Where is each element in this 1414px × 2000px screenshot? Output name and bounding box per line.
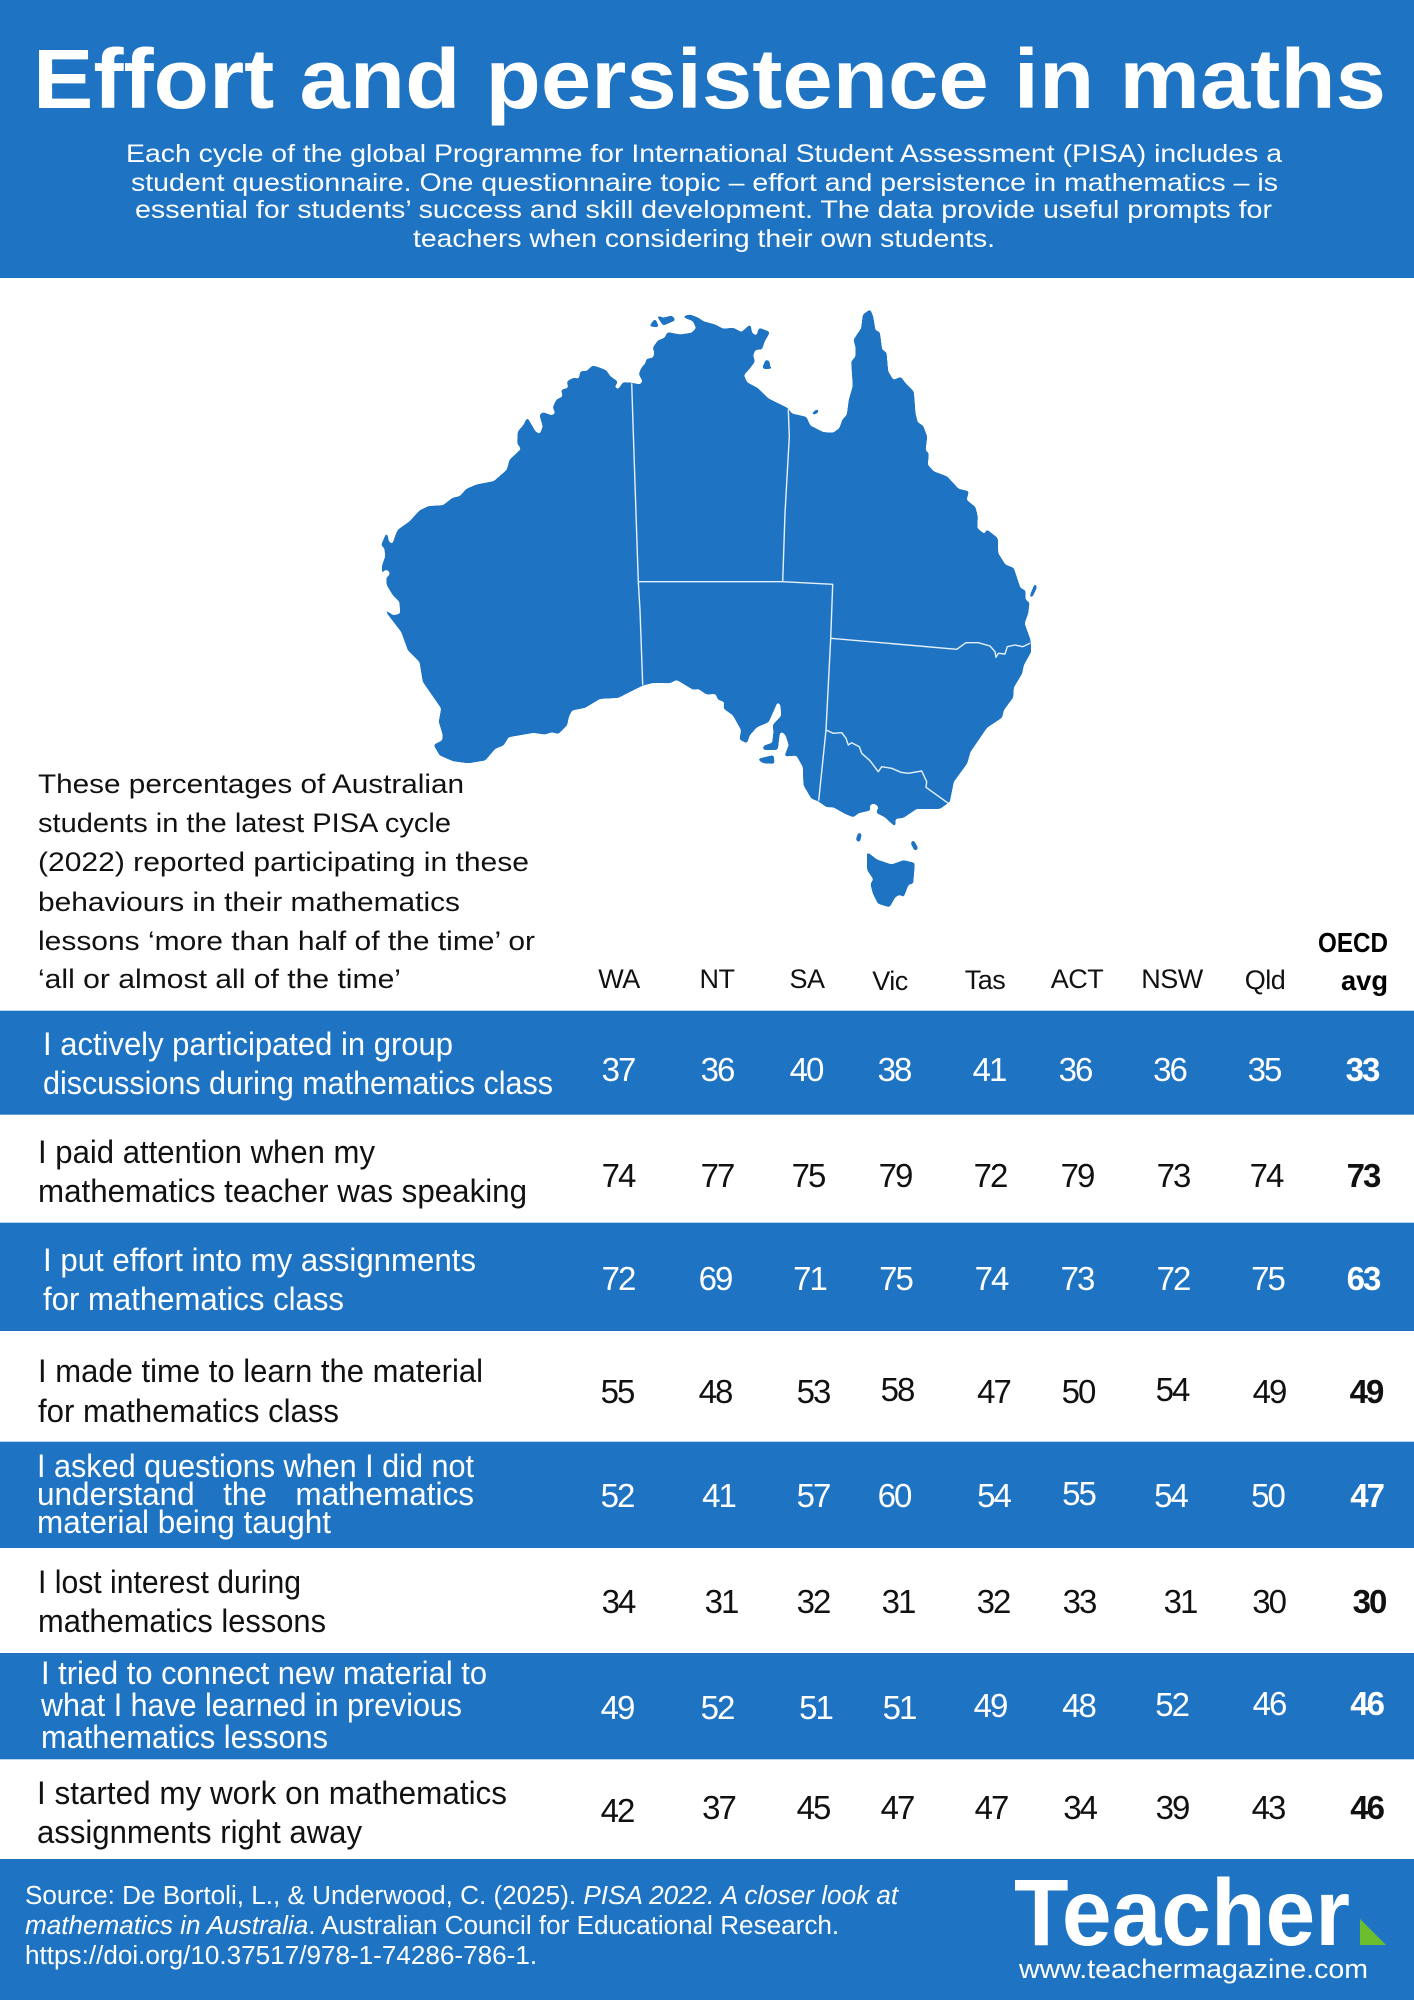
- row 2 values: 72: [974, 1157, 1007, 1194]
- intro text: student questionnaire. One questionnaire topic – effort and persistence in mathematics – is: [131, 169, 1278, 197]
- row 4: made time: [38, 1353, 1384, 1429]
- row 1 values: 36: [1153, 1051, 1186, 1088]
- row 5: asked questions: [0, 1442, 1414, 1548]
- column headers: SA: [789, 964, 825, 994]
- row 6: lost interest: [38, 1564, 1386, 1639]
- row 8 values: 39: [1156, 1789, 1189, 1826]
- row 6 values: 34: [602, 1583, 636, 1620]
- row 5 values: 54: [1154, 1477, 1188, 1514]
- row 3: put effort: [0, 1223, 1414, 1331]
- row 5 label: understand the mathematics: [37, 1476, 474, 1512]
- row 5 label: material being taught: [37, 1504, 331, 1540]
- row 1 values: 41: [973, 1051, 1006, 1088]
- row 4 values: 55: [601, 1373, 634, 1410]
- row 5 values: [601, 1475, 1384, 1514]
- row 6 values: 30: [1353, 1583, 1386, 1620]
- row 2 values: 75: [792, 1157, 825, 1194]
- row 7: connect new material: [0, 1653, 1414, 1759]
- row 3 values: 72: [602, 1260, 635, 1297]
- row 1 values: 40: [790, 1051, 824, 1088]
- row 4 values: 58: [881, 1371, 914, 1408]
- explanatory paragraph: lessons ‘more than half of the time’ or: [38, 926, 535, 956]
- row 5 label: [37, 1448, 474, 1540]
- source citation: https://doi.org/10.37517/978-1-74286-786-1.: [25, 1940, 537, 1970]
- Teacher logo: Teacher: [1014, 1860, 1350, 1966]
- row 3 values: 75: [879, 1260, 912, 1297]
- row 7 values: 51: [799, 1689, 832, 1726]
- row 3 label: [43, 1242, 476, 1317]
- row 7 values: 51: [883, 1689, 916, 1726]
- row 4 values: 49: [1253, 1373, 1286, 1410]
- row 7 values: 48: [1062, 1687, 1095, 1724]
- row 6 label: [38, 1564, 326, 1639]
- row 4 values: 54: [1156, 1371, 1190, 1408]
- column headers: Qld: [1245, 965, 1285, 995]
- source citation: mathematics in Australia. Australian Council for Educational Research.: [25, 1910, 839, 1940]
- column headers: Tas: [965, 965, 1005, 995]
- row 2 values: 77: [701, 1157, 734, 1194]
- footer panel: [0, 1859, 1414, 2000]
- column headers: Vic: [872, 966, 908, 996]
- explanatory paragraph: (2022) reported participating in these: [38, 847, 529, 877]
- header panel: [0, 0, 1414, 278]
- row 8 label: assignments right away: [37, 1814, 362, 1850]
- row 1 values: 36: [701, 1051, 734, 1088]
- row 8 values: 42: [601, 1792, 634, 1829]
- source citation: Source: De Bortoli, L., & Underwood, C. (2025). PISA 2022. A closer look at: [25, 1880, 900, 1910]
- explanatory paragraph: [38, 769, 535, 994]
- row 6 values: 31: [705, 1583, 738, 1620]
- row 7 label: [40, 1655, 487, 1755]
- row 6 values: 30: [1252, 1583, 1287, 1620]
- row 2 label: mathematics teacher was speaking: [38, 1173, 527, 1209]
- row 8: started work: [37, 1775, 1385, 1850]
- intro text: teachers when considering their own students.: [413, 225, 995, 253]
- row 1 values: 33: [1346, 1051, 1380, 1088]
- row 2 values: [602, 1157, 1381, 1194]
- row 8 values: 37: [702, 1789, 735, 1826]
- row 7 values: 46: [1253, 1685, 1286, 1722]
- intro text: [126, 140, 1282, 253]
- row 3 values: 63: [1347, 1260, 1381, 1297]
- row 2: paid attention: [38, 1134, 1381, 1209]
- row 5 values: 52: [601, 1477, 634, 1514]
- row 4 label: for mathematics class: [38, 1393, 339, 1429]
- row 3 values: 73: [1061, 1260, 1094, 1297]
- source citation: [25, 1880, 900, 1970]
- row 8 values: 47: [881, 1789, 914, 1826]
- row 2 label: [38, 1134, 527, 1209]
- row 3 label: I put effort into my assignments: [43, 1242, 476, 1278]
- row 6 label: I lost interest during: [38, 1564, 301, 1600]
- row 4 values: 53: [797, 1373, 830, 1410]
- row 3 values: 72: [1157, 1260, 1190, 1297]
- row 3 values: [602, 1260, 1381, 1297]
- row 3 values: 69: [699, 1260, 732, 1297]
- row 5 values: 54: [977, 1477, 1011, 1514]
- row 1 values: 35: [1248, 1051, 1281, 1088]
- column headers: avg: [1341, 965, 1388, 996]
- row 1 label: [43, 1026, 553, 1101]
- row 6 values: 31: [1164, 1583, 1197, 1620]
- row 1 label: I actively participated in group: [43, 1026, 453, 1062]
- explanatory paragraph: behaviours in their mathematics: [38, 887, 460, 917]
- column headers: OECD: [1318, 927, 1388, 958]
- row 1 label: discussions during mathematics class: [43, 1065, 553, 1101]
- row 7 values: 46: [1350, 1685, 1385, 1722]
- row 4 values: 49: [1350, 1373, 1384, 1410]
- row 8 values: [601, 1789, 1385, 1829]
- row 2 values: 73: [1157, 1157, 1190, 1194]
- intro text: essential for students’ success and skill development. The data provide useful prompts for: [135, 196, 1272, 224]
- row 6 values: 32: [797, 1583, 830, 1620]
- row 2 values: 79: [879, 1157, 912, 1194]
- map of Australia: [382, 310, 1036, 907]
- row 2 values: 74: [602, 1157, 636, 1194]
- explanatory paragraph: students in the latest PISA cycle: [38, 808, 451, 838]
- row 5 values: 50: [1251, 1477, 1285, 1514]
- explanatory paragraph: These percentages of Australian: [38, 769, 464, 799]
- row 5 label: I asked questions when I did not: [37, 1448, 474, 1484]
- column headers: WA: [598, 964, 640, 994]
- row 5 values: 41: [702, 1477, 735, 1514]
- row 5 values: 55: [1062, 1475, 1095, 1512]
- Teacher logo: www.teachermagazine.com: [1018, 1954, 1368, 1984]
- row 6 label: mathematics lessons: [38, 1603, 326, 1639]
- row 7 values: 49: [974, 1687, 1007, 1724]
- row 8 values: 47: [975, 1789, 1008, 1826]
- row 8 label: I started my work on mathematics: [37, 1775, 507, 1811]
- row 2 label: I paid attention when my: [38, 1134, 375, 1170]
- row 1 values: 38: [878, 1051, 911, 1088]
- row 3 values: 71: [793, 1260, 826, 1297]
- row 1 values: 37: [602, 1051, 635, 1088]
- row 3 values: 74: [975, 1260, 1009, 1297]
- row 8 values: 34: [1063, 1789, 1098, 1826]
- row 4 values: 50: [1062, 1373, 1096, 1410]
- row 4 values: [601, 1371, 1384, 1410]
- row 3 values: 75: [1251, 1260, 1284, 1297]
- row 8 values: 45: [797, 1789, 830, 1826]
- row 6 values: 32: [977, 1583, 1010, 1620]
- column headers: [598, 927, 1388, 996]
- row 7 values: 52: [701, 1689, 734, 1726]
- row 4 label: [38, 1353, 483, 1429]
- row 5 values: 60: [878, 1477, 912, 1514]
- row 5 values: 47: [1350, 1477, 1384, 1514]
- row 1 values: 36: [1059, 1051, 1092, 1088]
- row 1 values: [602, 1051, 1380, 1088]
- row 4 values: 47: [977, 1373, 1010, 1410]
- row 2 values: 73: [1347, 1157, 1381, 1194]
- column headers: ACT: [1051, 964, 1103, 994]
- row 7 label: I tried to connect new material to: [41, 1655, 487, 1691]
- row 6 values: [602, 1583, 1386, 1620]
- row 7 label: what I have learned in previous: [40, 1687, 462, 1723]
- row 7 values: [601, 1685, 1385, 1726]
- row 2 values: 79: [1061, 1157, 1094, 1194]
- row 3 label: for mathematics class: [43, 1281, 344, 1317]
- row 4 values: 48: [699, 1373, 732, 1410]
- row 6 values: 31: [882, 1583, 915, 1620]
- row 8 values: 43: [1252, 1789, 1285, 1826]
- row 1: group discussions: [0, 1011, 1414, 1115]
- row 2 values: 74: [1250, 1157, 1284, 1194]
- column headers: NT: [700, 964, 734, 994]
- row 6 values: 33: [1063, 1583, 1096, 1620]
- row 8 values: 46: [1350, 1789, 1385, 1826]
- intro text: Each cycle of the global Programme for International Student Assessment (PISA) includes a: [126, 140, 1282, 168]
- column headers: NSW: [1141, 964, 1204, 994]
- row 4 label: I made time to learn the material: [38, 1353, 483, 1389]
- explanatory paragraph: ‘all or almost all of the time’: [38, 964, 401, 994]
- row 7 values: 49: [601, 1689, 634, 1726]
- title: Effort and persistence in maths: [33, 32, 1386, 126]
- row 7 label: mathematics lessons: [41, 1719, 328, 1755]
- row 7 values: 52: [1155, 1686, 1189, 1723]
- row 8 label: [37, 1775, 507, 1850]
- row 5 values: 57: [797, 1477, 830, 1514]
